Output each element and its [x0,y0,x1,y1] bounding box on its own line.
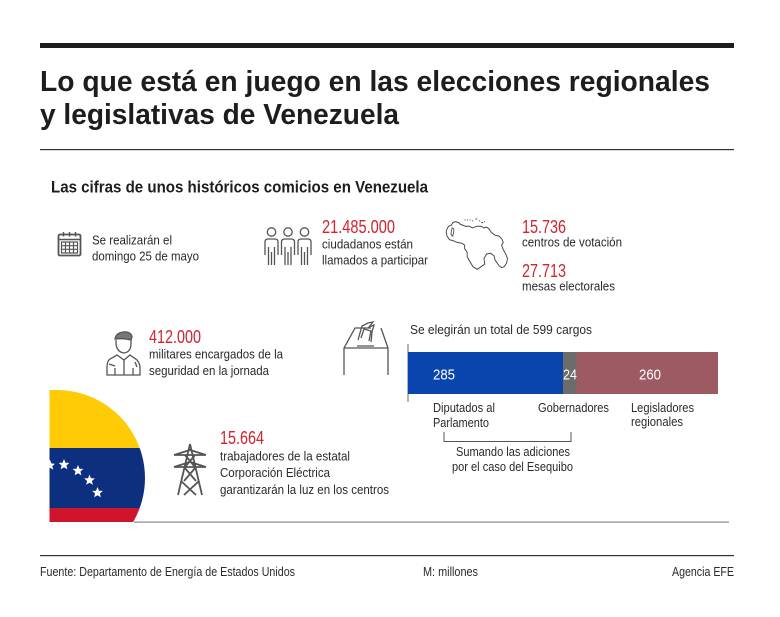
footer: Agencia EFE [672,564,734,579]
title [40,66,710,131]
label: Gobernadores: Gobernadores [538,400,609,415]
bar: Legisladores [576,352,718,394]
bracket and note: Esequibo: Sumando las adiciones [456,444,570,459]
subtitle: Las cifras de unos históricos comicios en Venezuela [51,178,429,196]
figure: centros: 15.736 [522,216,566,237]
stacked bar chart [408,344,718,430]
figure: military: 412.000 [149,326,201,347]
icon: calendar [58,232,80,256]
text: citizens: llamados a participar [322,252,429,268]
text: workers: Corporación Eléctrica [220,465,331,480]
label: Legisladores [631,400,694,429]
label: Diputados: Parlamento [433,415,489,430]
block: date [58,232,199,264]
bar: Legisladores: 260 [639,366,661,384]
text: military: militares encargados de la [149,346,284,362]
text: military: seguridad en la jornada [149,363,270,378]
icon: three people [265,228,311,265]
icon: map of Venezuela [446,219,507,269]
title: y legislativas de Venezuela [40,99,400,131]
flag: Venezuela [50,390,150,522]
text: citizens: ciudadanos están [322,236,413,252]
text: workers [220,448,389,497]
bracket and note: Esequibo [444,432,573,474]
bar: Diputados: 285 [433,366,455,384]
text: workers: trabajadores de la estatal [220,448,350,464]
text: date: domingo 25 de mayo [92,248,199,264]
figure: citizens: 21.485.000 [322,216,395,237]
text: mesas: mesas electorales [522,278,615,294]
bracket and note: Esequibo: por el caso del Esequibo [452,459,573,474]
icon: soldier [107,332,140,375]
title: Lo que está en juego en las elecciones regionales [40,66,710,98]
label: Legisladores: regionales [631,414,683,429]
text: military [149,346,284,378]
figure: workers: 15.664 [220,427,264,448]
footer: Fuente: Departamento de Energía de Estados Unidos [40,564,295,579]
heading: cargos: Se elegirán un total de 599 cargos [410,322,592,337]
label: Diputados [433,400,495,430]
text: citizens [322,236,429,268]
icon: ballot box [344,322,388,375]
footer [40,564,734,579]
text: date [92,232,199,264]
label: Diputados: Diputados al [433,400,495,415]
block: voting centres [446,216,622,294]
bar: Gobernadores: 24 [563,366,577,384]
block: military [107,326,284,378]
text: centros: centros de votación [522,234,622,250]
icon: power pylon [174,444,206,495]
bar: Gobernadores [563,352,577,394]
text: workers: garantizarán la luz en los centros [220,482,389,497]
label: Legisladores: Legisladores [631,400,694,415]
block: citizens [265,216,429,268]
block: electricity workers [174,427,389,497]
text: date: Se realizarán el [92,232,172,248]
figure: mesas: 27.713 [522,260,566,281]
footer: M: millones [423,564,478,579]
bar: Diputados [408,352,563,394]
